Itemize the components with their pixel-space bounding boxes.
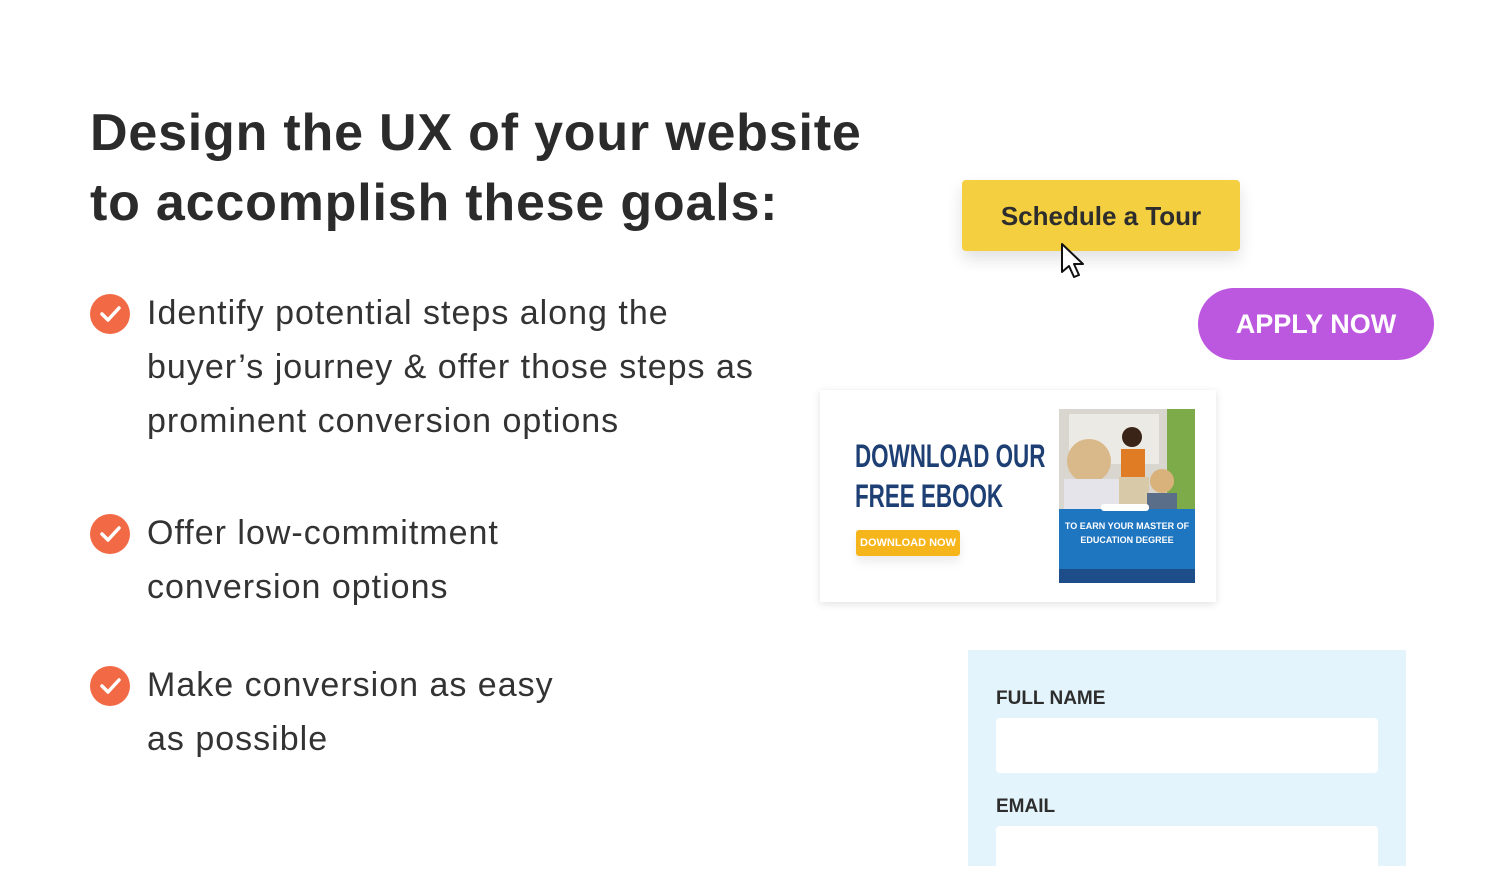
download now button: DOWNLOAD NOW xyxy=(860,537,956,549)
goal text 1: buyer’s journey & offer those steps as xyxy=(147,348,754,386)
button: apply now xyxy=(1198,288,1434,360)
input: email xyxy=(996,826,1378,881)
icon: check xyxy=(90,294,130,334)
goal text 3 xyxy=(147,666,554,758)
goal item 3 xyxy=(90,666,554,758)
label: email: EMAIL xyxy=(996,796,1055,817)
form panel xyxy=(968,650,1406,866)
icon: check xyxy=(90,666,130,706)
goal text 1: Identify potential steps along the xyxy=(147,294,669,332)
ebook cover: EDUCATION DEGREE xyxy=(1080,535,1174,545)
ebook heading: FREE EBOOK xyxy=(855,478,1003,514)
label: full name: FULL NAME xyxy=(996,688,1105,709)
ebook cover: TO EARN YOUR MASTER OF xyxy=(1065,521,1190,531)
button: schedule a tour xyxy=(962,180,1240,251)
ebook cover xyxy=(1059,409,1195,583)
input: full name xyxy=(996,718,1378,773)
button: schedule a tour: Schedule a Tour xyxy=(1001,201,1201,231)
ebook heading: DOWNLOAD OUR xyxy=(855,438,1045,474)
title: Design the UX of your website xyxy=(90,104,862,162)
goal text 3: Make conversion as easy xyxy=(147,666,554,704)
download now button xyxy=(856,530,960,556)
goal text 1: prominent conversion options xyxy=(147,402,619,440)
title: to accomplish these goals: xyxy=(90,174,778,232)
goal item 2 xyxy=(90,514,499,606)
goal text 2 xyxy=(147,514,499,606)
goal text 1 xyxy=(147,294,754,440)
icon: check xyxy=(90,514,130,554)
ebook card xyxy=(820,390,1216,602)
icon: cursor xyxy=(1061,243,1084,278)
goal item 1 xyxy=(90,294,754,440)
goal text 2: conversion options xyxy=(147,568,449,606)
title xyxy=(90,104,862,232)
goal text 2: Offer low-commitment xyxy=(147,514,499,552)
button: apply now: APPLY NOW xyxy=(1236,309,1396,339)
goal text 3: as possible xyxy=(147,720,328,758)
ebook heading xyxy=(855,438,1045,514)
